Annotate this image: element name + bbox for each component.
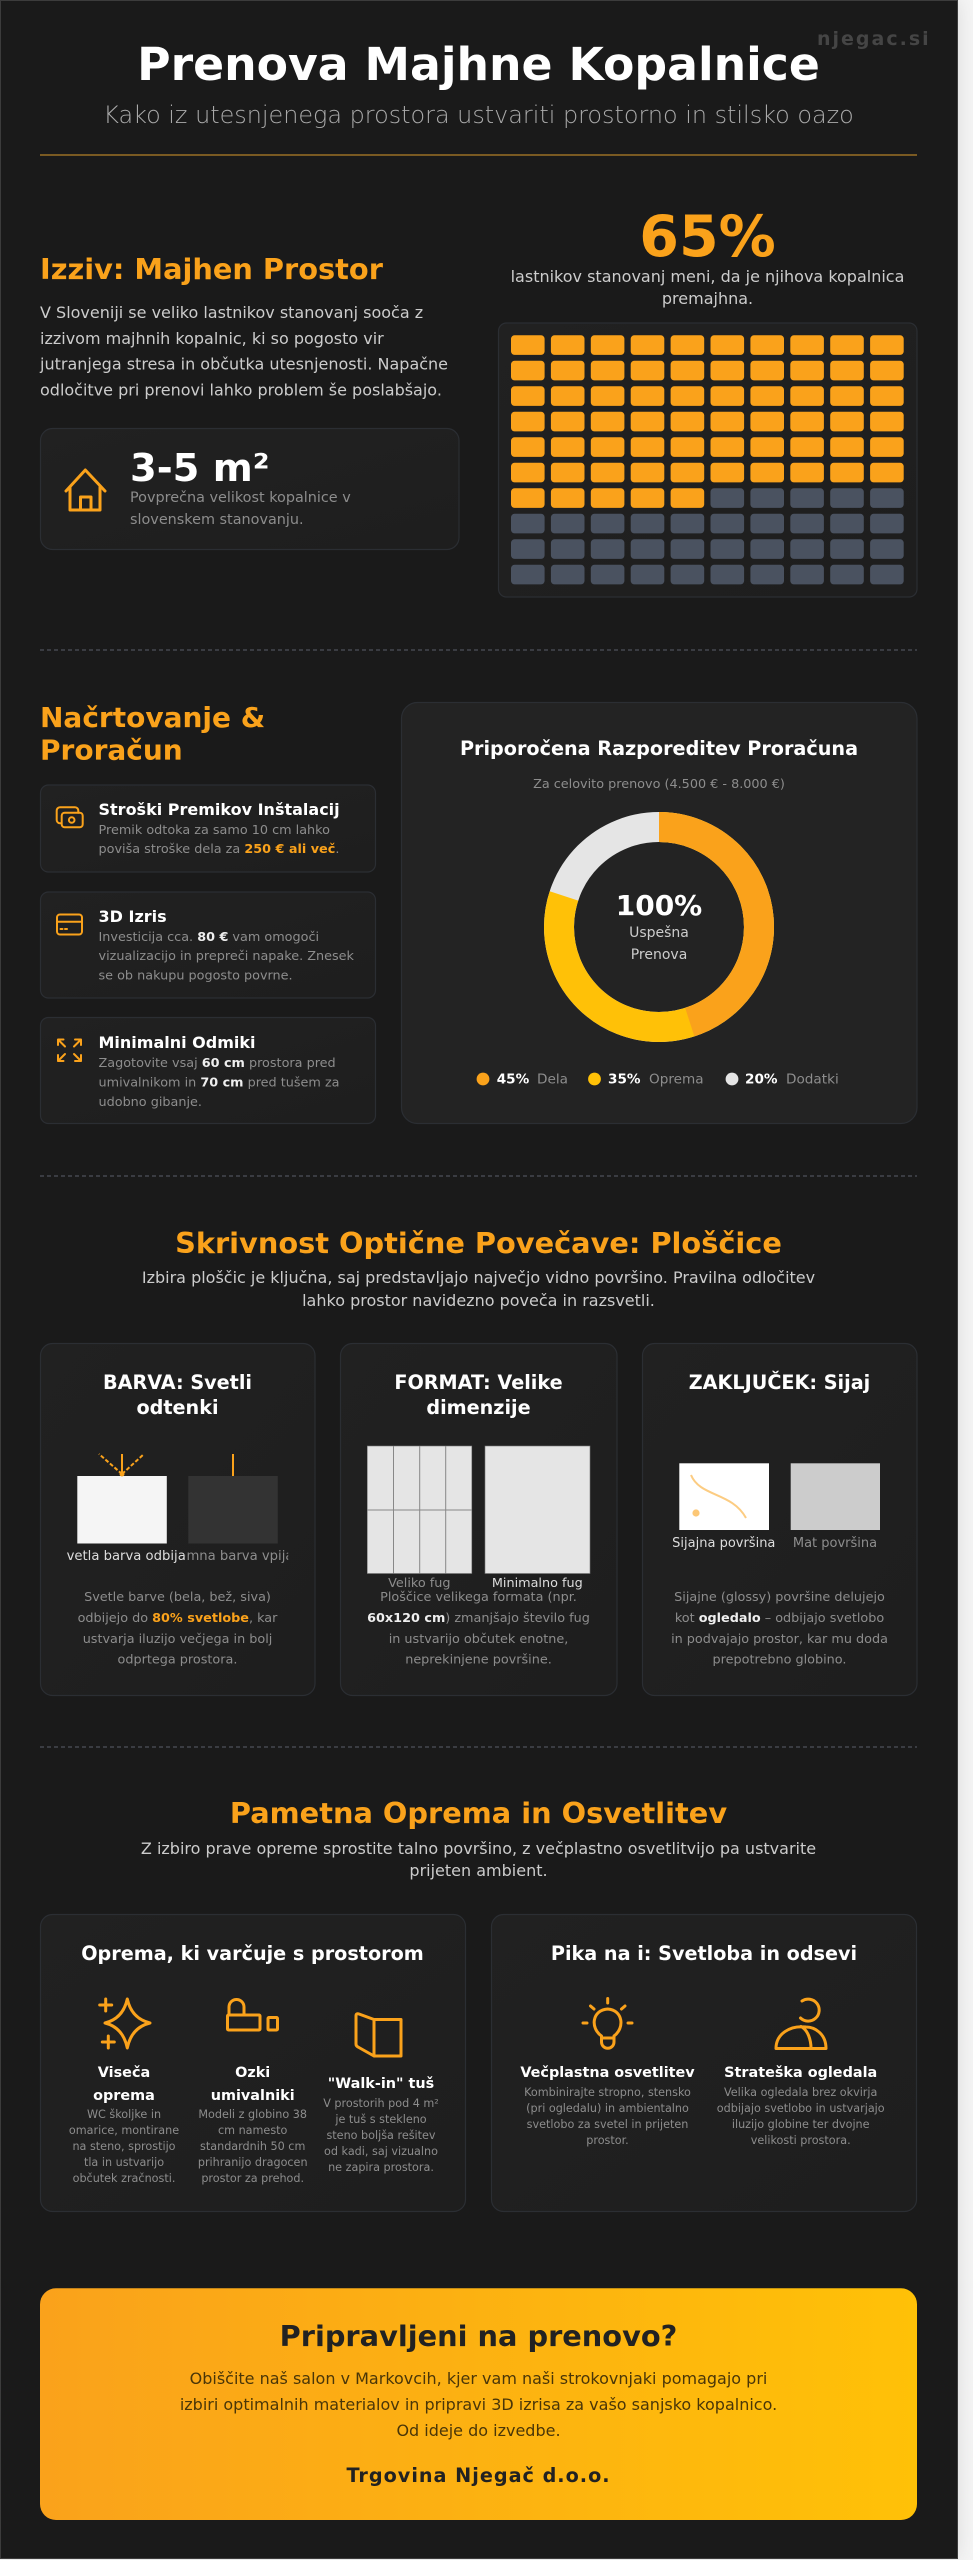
item: narrow basins: prihranijo dragocen: [198, 2156, 308, 2169]
icon: house: [66, 470, 105, 510]
panel: 3D render: vizualizacijo in prepreči napake. Znesek: [98, 949, 355, 964]
icon: shower door: [356, 2014, 401, 2056]
panel: installation costs: Premik odtoka za samo 10 cm lahko: [98, 823, 330, 838]
item: narrow basins: cm namesto: [218, 2124, 288, 2137]
illustration: glossy and matte: [672, 1463, 880, 1551]
donut chart: [559, 827, 759, 1027]
item: walk-in shower: ne zapira prostora.: [328, 2161, 434, 2174]
caption: 65%: [511, 267, 904, 308]
legend: Oprema: [649, 1072, 704, 1088]
panel: minimal clearances: Minimalni Odmiki: [98, 1033, 256, 1052]
panel: installation costs: poviša stroške dela za 250 € ali več.: [98, 842, 339, 857]
panel: call to action: Pripravljeni na prenovo?: [280, 2319, 677, 2353]
panel: finish: [642, 1344, 917, 1696]
panel: light and reflections: [492, 1914, 916, 2212]
stat description: Povprečna velikost kopalnice v: [130, 490, 351, 506]
illustration: light and dark surfaces: Svetla barva odbija: [58, 1549, 186, 1564]
illustration: glossy and matte: Sijajna površina: [672, 1536, 775, 1551]
chart title: Priporočena Razporeditev Proračuna: [460, 737, 858, 760]
icon: sparkle: [100, 1999, 150, 2048]
donut center label: Uspešna: [629, 925, 689, 941]
item: narrow basins: umivalniki: [211, 2088, 295, 2104]
panel: colour: Svetle barve (bela, bež, siva): [84, 1590, 271, 1605]
panel: call to action: izbiri optimalnih materialov in pripravi 3D izrisa za vašo sanjsko kopalnico.: [180, 2395, 777, 2414]
panel: finish: Sijajne (glossy) površine delujejo: [674, 1590, 885, 1605]
panel: 3D render: 3D Izris: [98, 907, 167, 926]
item: narrow basins: prostor za prehod.: [201, 2172, 304, 2185]
panel: call to action: Trgovina Njegač d.o.o.: [346, 2464, 611, 2487]
icon: mirror figure: [776, 1999, 826, 2048]
item: narrow basins: Ozki: [235, 2065, 270, 2081]
item: layered lighting: Večplastna osvetlitev: [520, 2065, 695, 2081]
icon: banknotes: [57, 807, 83, 827]
panel: format: 60x120 cm) zmanjšajo število fug: [367, 1611, 590, 1626]
item: narrow basins: [198, 2000, 308, 2185]
text block: izziv: izzivom majhnih kopalnic, ki so pogosto vir: [40, 329, 384, 348]
icon: credit card: [57, 914, 82, 934]
panel: average size stat: [40, 428, 459, 550]
panel: format: neprekinjene površine.: [405, 1652, 552, 1668]
panel: colour: odprtega prostora.: [118, 1652, 237, 1668]
panel: 3D render: [40, 892, 376, 998]
panel: minimal clearances: umivalnikom in 70 cm pred tušem za: [98, 1076, 340, 1090]
intro: tiles: Izbira ploščic je ključna, saj predstavljajo največjo vidno površino. Pravilna odločitev: [142, 1268, 815, 1287]
heading: tiles: Skrivnost Optične Povečave: Ploščice: [175, 1226, 782, 1260]
panel: 3D render: se ob nakupu pogosto povrne.: [98, 968, 293, 984]
panel: space-saving equipment: [40, 1914, 466, 2212]
caption: 65%: lastnikov stanovanj meni, da je njihova kopalnica: [511, 267, 904, 286]
panel: call to action: Od ideje do izvedbe.: [396, 2421, 561, 2440]
item: layered lighting: [520, 1998, 695, 2147]
donut center label: 100%: [616, 889, 702, 922]
stat description: slovenskem stanovanju.: [130, 512, 304, 528]
item: layered lighting: (pri ogledalu) in ambientalno: [526, 2102, 689, 2115]
item: walk-in shower: "Walk-in" tuš: [328, 2076, 434, 2092]
panel: minimal clearances: [40, 1018, 376, 1124]
panel: finish: ZAKLJUČEK: Sijaj: [689, 1370, 870, 1394]
item: layered lighting: prostor.: [586, 2134, 629, 2147]
item: walk-in shower: V prostorih pod 4 m²: [323, 2097, 439, 2110]
text block: izziv: [39, 303, 448, 400]
legend: Dela: [537, 1072, 568, 1088]
intro: equipment: Z izbiro prave opreme sprostite talno površino, z večplastno osvetlitvijo pa ustvarite: [141, 1839, 816, 1858]
panel: light and reflections: Pika na i: Svetloba in odsevi: [551, 1942, 857, 1965]
item: walk-in shower: steno boljša rešitev: [326, 2129, 436, 2142]
item: mirrors: Velika ogledala brez okvirja: [724, 2086, 877, 2099]
panel: colour: ustvarja iluzijo večjega in bolj: [83, 1632, 272, 1647]
stat: 65%: 65%: [639, 204, 776, 270]
text block: izziv: jutranjega stresa in občutka utesnjenosti. Napačne: [39, 354, 448, 374]
item: mirrors: velikosti prostora.: [751, 2134, 851, 2147]
item: wall-hung: Viseča: [98, 2065, 150, 2081]
illustration: light and dark surfaces: [58, 1454, 293, 1564]
item: layered lighting: Kombinirajte stropno, stensko: [524, 2086, 691, 2099]
heading: equipment: Pametna Oprema in Osvetlitev: [230, 1796, 727, 1830]
intro: tiles: lahko prostor navidezno poveča in razsvetli.: [302, 1291, 655, 1310]
item: narrow basins: standardnih 50 cm: [200, 2140, 305, 2153]
panel: colour: odtenki: [136, 1396, 219, 1419]
waffle chart: [498, 323, 917, 597]
item: walk-in shower: [323, 2014, 439, 2174]
panel: installation costs: Stroški Premikov Inštalacij: [98, 800, 340, 819]
illustration: glossy and matte: Mat površina: [793, 1536, 877, 1551]
intro: equipment: [141, 1839, 816, 1880]
panel: 3D render: Investicija cca. 80 € vam omogoči: [98, 930, 319, 945]
donut center label: [616, 889, 702, 963]
panel: call to action: [40, 2288, 917, 2520]
text block: izziv: odločitve pri prenovi lahko problem še poslabšajo.: [40, 380, 442, 400]
panel: call to action: Obiščite naš salon v Markovcih, kjer vam naši strokovnjaki pomagajo pri: [190, 2369, 767, 2388]
icon: expand arrows: [58, 1040, 81, 1061]
item: mirrors: iluzijo globine ter dvojne: [732, 2118, 870, 2131]
item: wall-hung: tla in ustvarijo: [84, 2156, 164, 2169]
item: walk-in shower: od kadi, saj vizualno: [324, 2145, 438, 2158]
panel: finish: in podvajajo prostor, kar mu doda: [671, 1632, 888, 1647]
illustration: tile formats: Veliko fug: [388, 1576, 450, 1591]
panel: format: [340, 1344, 617, 1696]
illustration: tile formats: [367, 1446, 590, 1591]
item: walk-in shower: je tuš s stekleno: [334, 2113, 427, 2126]
stat description: [130, 490, 351, 528]
panel: colour: [40, 1344, 315, 1696]
heading: planning: Načrtovanje &: [40, 701, 265, 734]
panel: format: in ustvarijo občutek enotne,: [389, 1632, 568, 1647]
icon: basin: [228, 2000, 278, 2030]
item: layered lighting: svetlobo za svetel in prijeten: [527, 2118, 688, 2131]
heading: planning: [40, 701, 265, 766]
item: mirrors: odbijajo svetlobo in ustvarjajo: [717, 2102, 885, 2115]
panel: minimal clearances: udobno gibanje.: [98, 1095, 202, 1110]
subtitle: Kako iz utesnjenega prostora ustvariti prostorno in stilsko oazo: [103, 101, 854, 129]
legend: 20%: [745, 1072, 778, 1088]
legend: 45%: [497, 1072, 530, 1088]
item: wall-hung: WC školjke in: [87, 2108, 161, 2121]
item: wall-hung: [69, 1999, 179, 2185]
panel: format: Ploščice velikega formata (npr.: [380, 1590, 577, 1605]
illustration: light and dark surfaces: Temna barva vpija: [172, 1549, 293, 1564]
panel: minimal clearances: Zagotovite vsaj 60 cm prostora pred: [98, 1056, 336, 1071]
heading: izziv: Izziv: Majhen Prostor: [40, 252, 384, 286]
item: mirrors: [717, 1999, 885, 2147]
intro: tiles: [142, 1268, 815, 1310]
panel: installation costs: [40, 785, 376, 872]
caption: 65%: premajhna.: [662, 289, 753, 308]
donut center label: Prenova: [631, 947, 687, 963]
item: wall-hung: na steno, sprostijo: [72, 2140, 176, 2153]
panel: budget donut: [402, 702, 917, 1124]
item: wall-hung: omarice, montirane: [69, 2124, 179, 2137]
item: mirrors: Strateška ogledala: [724, 2065, 877, 2081]
title: Prenova Majhne Kopalnice: [137, 38, 820, 91]
icon: light bulb: [583, 1998, 632, 2048]
watermark: njegac.si: [817, 28, 931, 50]
panel: format: FORMAT: Velike: [394, 1371, 563, 1394]
stat value: 3-5 m²: [130, 446, 270, 491]
item: narrow basins: Modeli z globino 38: [198, 2108, 307, 2121]
panel: finish: kot ogledalo – odbijajo svetlobo: [675, 1611, 884, 1626]
panel: format: dimenzije: [426, 1396, 531, 1419]
panel: colour: BARVA: Svetli: [103, 1371, 252, 1394]
item: wall-hung: občutek zračnosti.: [73, 2172, 175, 2185]
text block: izziv: V Sloveniji se veliko lastnikov stanovanj sooča z: [40, 303, 423, 322]
legend: Dodatki: [786, 1072, 839, 1088]
panel: budget donut: Za celovito prenovo (4.500 € - 8.000 €): [533, 777, 785, 792]
heading: planning: Proračun: [40, 734, 183, 766]
legend: 35%: [608, 1072, 641, 1088]
item: wall-hung: oprema: [93, 2088, 155, 2104]
panel: finish: prepotrebno globino.: [713, 1652, 846, 1668]
legend: [477, 1072, 839, 1088]
illustration: tile formats: Minimalno fug: [492, 1576, 583, 1591]
intro: equipment: prijeten ambient.: [409, 1861, 548, 1880]
panel: space-saving equipment: Oprema, ki varčuje s prostorom: [81, 1942, 424, 1965]
panel: colour: odbijejo do 80% svetlobe, kar: [78, 1611, 278, 1626]
